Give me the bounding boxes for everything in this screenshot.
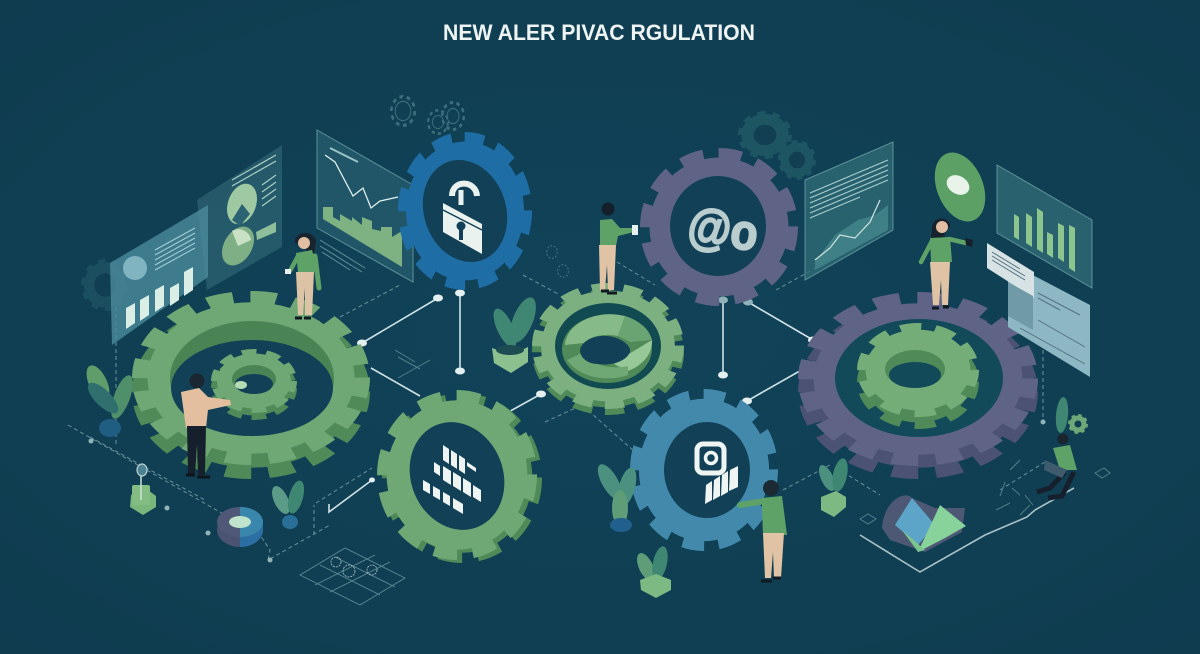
icon: at glyph: @o [685, 197, 762, 262]
panel: pie charts [197, 145, 282, 290]
title: NEW ALER PIVAC RGULATION [443, 20, 755, 45]
icon: green badge [925, 145, 995, 229]
donut chart ring [562, 314, 652, 383]
dim gear behind left panel [83, 262, 127, 308]
plant: center square pot [489, 294, 541, 373]
plant: bottom-left small [268, 479, 307, 529]
connector lines and nodes [68, 260, 1074, 572]
gear: grey at-sign [648, 156, 790, 298]
gear: green bottom data [385, 398, 534, 554]
plant: left blue pot [82, 362, 137, 437]
icon: magnifier block [130, 464, 156, 515]
icon: padlock [443, 184, 482, 254]
icon: data glyph blocks [423, 445, 481, 514]
inner green gear [863, 328, 973, 424]
gear: green center [540, 289, 676, 409]
panel: text document [987, 243, 1090, 377]
panel: right bar chart [997, 165, 1092, 288]
icon: camera [697, 444, 738, 504]
panel: bar dashboard [110, 205, 208, 345]
gear: blue lock [405, 140, 525, 282]
panel: line and bar chart [317, 130, 413, 282]
dark gears behind top grey gear [741, 113, 814, 178]
plant: right square pot [816, 457, 850, 517]
inner small gear [215, 352, 293, 417]
person: woman with tablet [285, 233, 319, 318]
plant: blue gear side [593, 461, 640, 532]
chart: 3D dome chart [882, 495, 966, 552]
panel: text and line chart [805, 142, 893, 280]
plant and cog: behind laptop user [1054, 397, 1087, 433]
gear: large purple with green gear [810, 301, 1026, 470]
gear: large green with inner gear [144, 300, 358, 470]
person: man at blue gear [740, 480, 787, 581]
person: man with laptop [1037, 434, 1077, 498]
icon: data disc [217, 507, 263, 547]
person: man on center gear [599, 202, 638, 293]
background small gears [391, 97, 568, 277]
plant: bottom center [633, 545, 671, 598]
icons: faint symbols [395, 350, 1110, 524]
diagram: grid with cogs [300, 548, 405, 605]
gear: blue camera [637, 397, 771, 543]
person: woman on purple gear [921, 219, 973, 308]
person: man with magnifier [181, 374, 247, 477]
